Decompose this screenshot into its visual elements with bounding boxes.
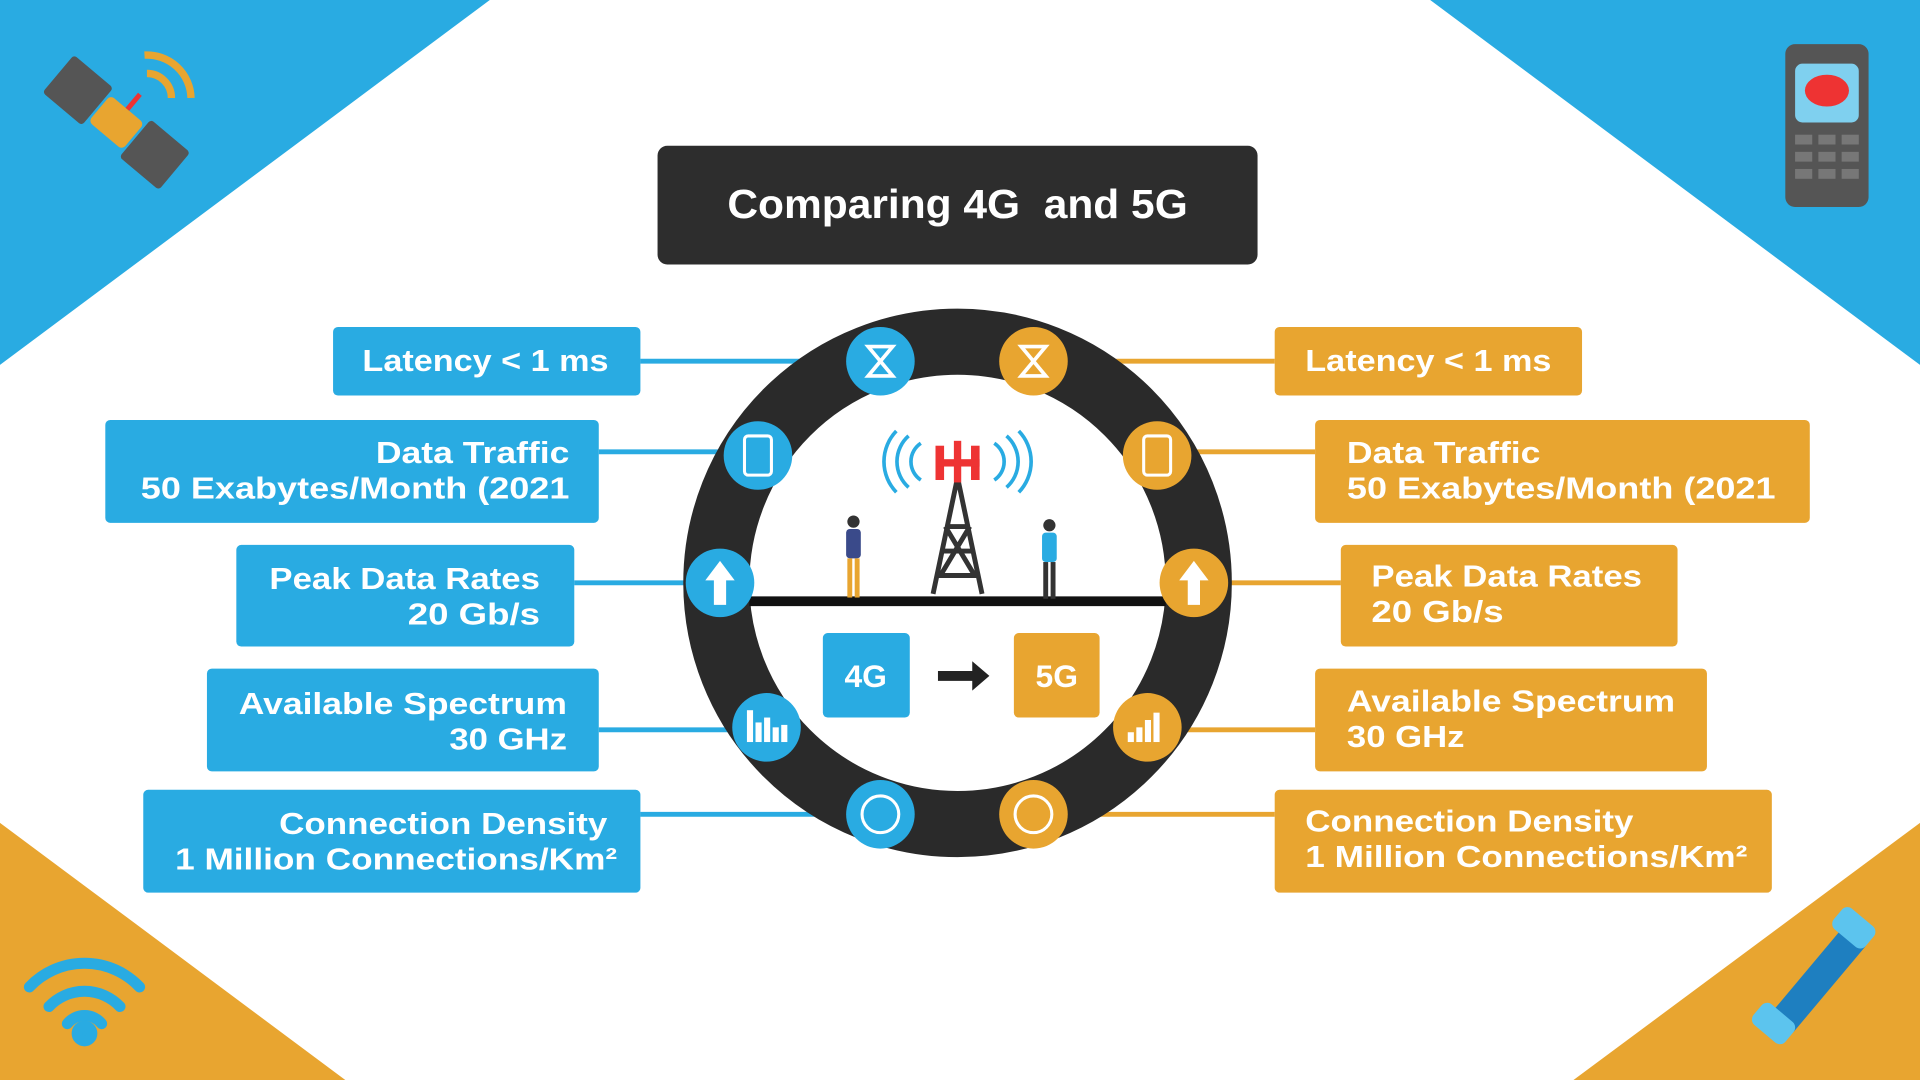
left boxes (4G): 20 Gb/s <box>408 597 540 631</box>
right boxes (5G): 20 Gb/s <box>1371 595 1504 629</box>
right boxes (5G): Peak Data Rates <box>1371 560 1642 594</box>
right boxes (5G): Latency < 1 ms <box>1305 344 1551 378</box>
right boxes (5G) <box>1275 327 1810 893</box>
ring icons 4G <box>686 327 915 849</box>
4G to 5G: 4G <box>844 658 887 694</box>
icon: wifi <box>29 963 140 1041</box>
title: Comparing 4G and 5G <box>727 181 1188 227</box>
left boxes (4G): Connection Density <box>279 807 607 841</box>
icon: satellite signal <box>144 55 191 98</box>
right boxes (5G): 30 GHz <box>1347 720 1464 754</box>
left boxes (4G): Available Spectrum <box>239 687 567 721</box>
4G to 5G: 5G <box>1036 658 1078 694</box>
left boxes (4G): Data Traffic <box>376 436 569 470</box>
ring icons 5G <box>999 327 1228 849</box>
ring <box>716 342 1199 824</box>
right boxes (5G): 50 Exabytes/Month (2021 <box>1347 471 1776 505</box>
icon: satellite <box>42 46 198 190</box>
left boxes (4G): Latency < 1 ms <box>362 344 609 378</box>
left boxes (4G) <box>105 327 640 893</box>
right boxes (5G): 1 Million Connections/Km² <box>1305 840 1747 874</box>
icon: telephone handset <box>1749 904 1878 1047</box>
right boxes (5G): Data Traffic <box>1347 436 1540 470</box>
icon glyphs <box>705 347 1209 833</box>
left boxes (4G): 30 GHz <box>449 722 567 756</box>
left boxes (4G): Peak Data Rates <box>269 562 540 596</box>
4G to 5G <box>823 633 1100 718</box>
right boxes (5G): Available Spectrum <box>1347 684 1675 718</box>
icon: mobile phone <box>1785 44 1869 207</box>
title <box>658 146 1258 264</box>
left boxes (4G): 50 Exabytes/Month (2021 <box>141 471 569 505</box>
left boxes (4G): 1 Million Connections/Km² <box>175 842 617 876</box>
tower scene <box>749 431 1166 601</box>
right boxes (5G): Connection Density <box>1305 804 1633 838</box>
connector lines <box>574 361 1341 814</box>
